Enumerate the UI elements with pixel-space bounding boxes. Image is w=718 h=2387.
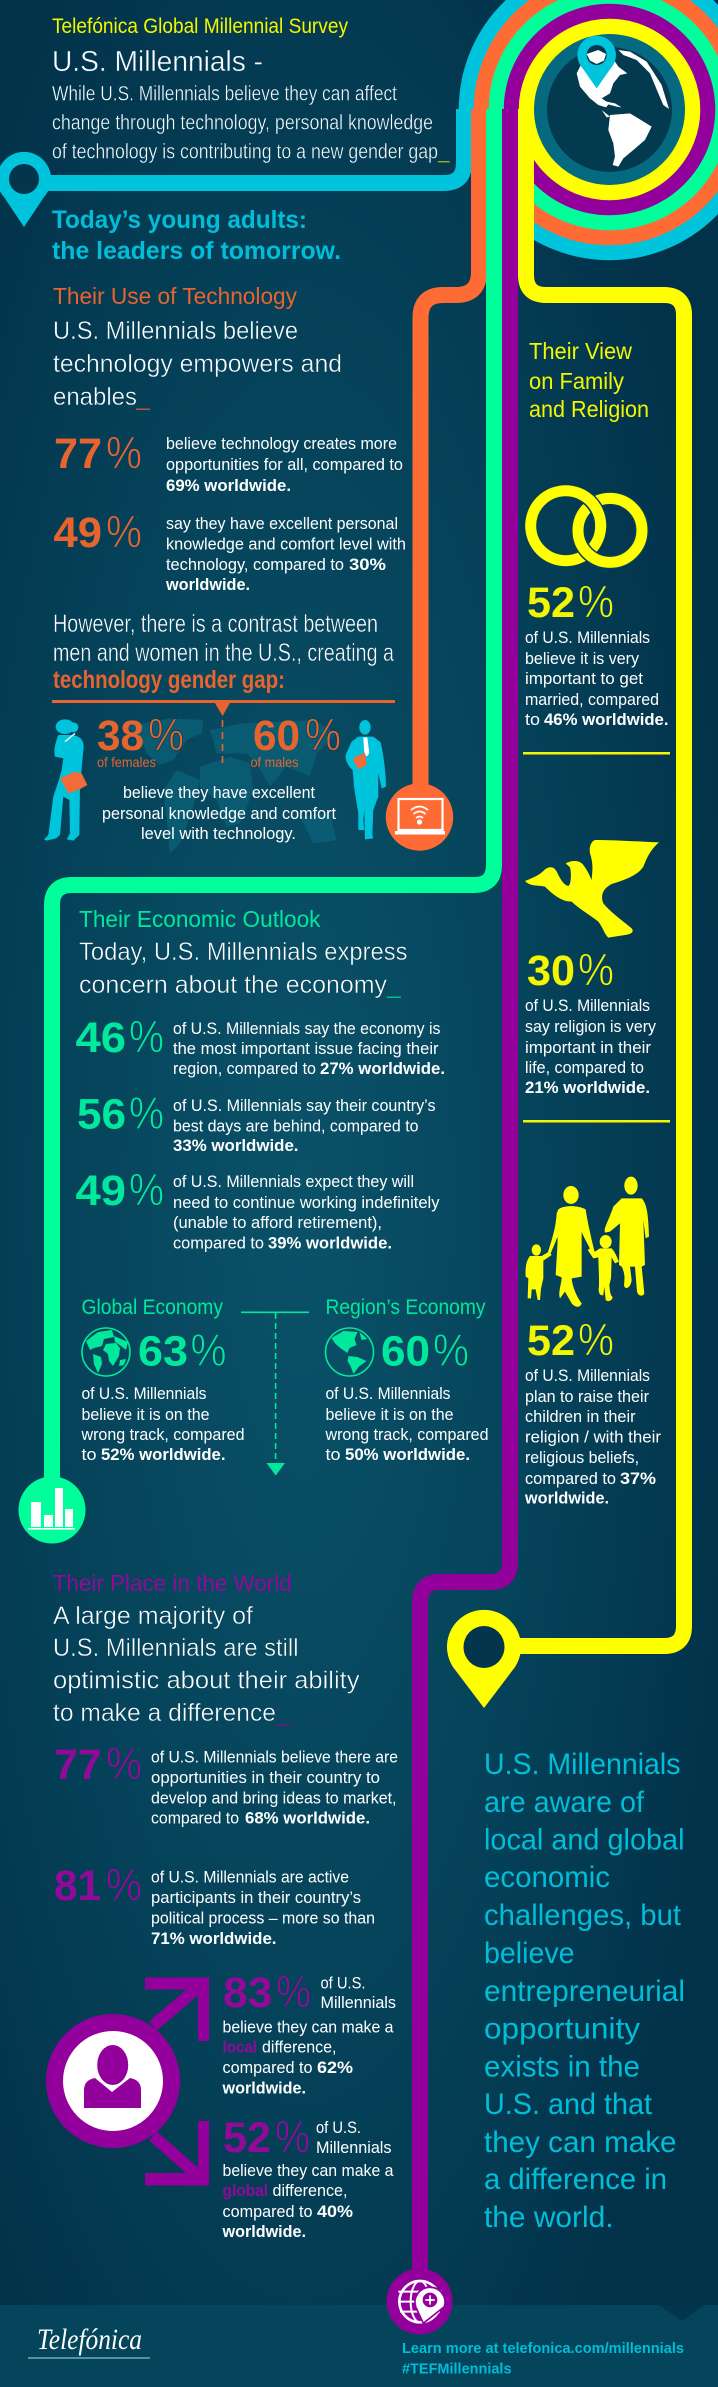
icon: wedding rings [531,491,642,562]
stat: 52% global difference [222,2111,394,2241]
stat: 30% religion: say religion is very [525,1017,656,1036]
stat: 52% married: believe it is very [525,649,639,668]
stat: 81%: participants in their country’s [151,1888,361,1907]
stat: 52% raise children: 37% [620,1469,656,1488]
subheading: young adults [52,206,341,265]
stat: 56%: of U.S. Millennials say their country’s [173,1096,436,1115]
panel: place in the world [46,1570,398,2241]
stat: 52% global difference: 52 [223,2114,271,2162]
stat: 52% global difference: 40% [317,2202,353,2221]
gender gap statement: men and women in the U.S., creating a [53,639,394,667]
conclusion text: they can make [484,2126,676,2159]
stat: 49%: (unable to afford retirement), [173,1213,382,1232]
ring: green line [52,0,718,1490]
section intro [79,938,408,999]
stat: 83% local difference: of U.S. [320,1974,366,1992]
survey title: Telefónica Global Millennial Survey [52,15,348,38]
stat: 38% of females: of females [97,754,156,770]
intro paragraph: of technology is contributing to a new gender gap [52,140,438,164]
stat: 83% local difference: local [222,2038,257,2056]
stat: 46%: the most important issue facing their [173,1039,439,1058]
section intro: _ [386,971,402,999]
stat: 30% religion: 21% worldwide. [525,1078,650,1097]
stat: 49%: 49 [54,509,102,557]
stat: 52% global difference: difference, [272,2181,348,2200]
subheading: young adults: the leaders of tomorrow. [52,237,341,265]
stat: 49% [76,1164,440,1252]
icon: dove [525,840,659,938]
intro paragraph: While U.S. Millennials believe they can affect [52,82,397,106]
stat: 49%: knowledge and comfort level with [166,534,406,554]
gender gap caption [102,783,336,843]
stat: 81%: 81 [54,1862,101,1910]
stat: 52% global difference: % [275,2111,310,2162]
section intro: _ [275,1699,291,1727]
stat: 52% raise children: children in their [525,1407,636,1426]
stat: 49%: % [129,1164,164,1215]
stat: 52% global difference: compared to [222,2202,312,2221]
column: region's economy: 50% worldwide. [345,1445,470,1464]
gender gap caption: level with technology. [141,824,296,843]
stat: 49%: compared to [173,1234,264,1252]
stat: 52% married: of U.S. Millennials [525,628,650,647]
stat: 56%: 33% worldwide. [173,1136,298,1155]
section heading: Their Use of Technology [53,283,297,309]
stat: 83% local difference: compared to [222,2058,312,2077]
stat: 46%: 46 [76,1014,126,1062]
panel: use of technology [44,283,453,851]
stat: 81%: % [106,1859,142,1910]
stat: 77% [54,1738,398,1828]
section intro: U.S. Millennials are still [53,1634,298,1662]
stat: 52% raise children: of U.S. Millennials [525,1366,650,1385]
stat: 46%: region, compared to [173,1059,316,1078]
stat: 49%: of U.S. Millennials expect they will [173,1172,414,1191]
section heading: Their Economic Outlook [79,906,321,932]
learn more link [402,2340,684,2378]
conclusion text: the world. [484,2201,614,2234]
section intro: optimistic about their ability [53,1666,360,1694]
stat: 52% married: to [525,710,540,729]
section heading: Their Place in the World [53,1570,292,1596]
column: global economy: 63 [138,1328,188,1376]
stat: 49%: worldwide. [165,575,250,594]
section intro: concern about the economy [79,971,387,999]
stat: 77%: compared to [151,1808,239,1828]
gender gap caption: believe they have excellent [123,783,315,802]
column: region's economy: % [433,1325,469,1376]
stat: 38% of females: % [148,709,184,760]
stat: 52% married: 46% worldwide. [544,710,668,729]
conclusion text: economic [484,1861,610,1894]
ring: cyan line [24,0,718,252]
ring: orange line [420,0,718,790]
stat: 49% [54,506,406,594]
stat: 77%: opportunities for all, compared to [166,455,403,474]
stat: 52% married [525,576,668,729]
gender gap statement: However, there is a contrast between [53,610,378,638]
stat: 52% married: married, compared [525,690,659,709]
conclusion text: challenges, but [484,1899,682,1932]
section intro: _ [135,383,151,411]
stat: 60% of males [250,709,341,770]
stat: 52% raise children: religion / with their [525,1428,661,1446]
figure: man [346,720,386,839]
stat: 46%: % [129,1011,164,1062]
column: global economy: wrong track, compared [81,1425,245,1444]
Telefónica logo: Telefónica [37,2323,142,2356]
gender gap statement [53,610,394,694]
stat: 30% religion: % [578,944,614,995]
gender gap caption: personal knowledge and comfort [102,804,336,823]
icon: person with arrows [46,1978,209,2186]
stat: 77%: 77 [54,430,102,478]
stat: 46%: 27% worldwide. [320,1059,445,1078]
icon: globe with plus pin [386,2268,452,2334]
column: global economy: to [82,1445,96,1464]
stat: 60% of males: % [305,709,341,760]
stat: 30% religion: of U.S. Millennials [525,996,650,1015]
stat: 49%: 39% worldwide. [268,1234,392,1252]
section intro: A large majority of [53,1602,253,1630]
stat: 77%: 69% worldwide. [166,476,291,495]
stat: 52% married: % [578,576,614,627]
stat: 81%: political process – more so than [151,1908,375,1928]
conclusion text: local and global [484,1824,684,1856]
stat: 30% religion [525,944,656,1097]
stat: 81%: of U.S. Millennials are active [151,1868,349,1886]
stat: 77%: 68% worldwide. [245,1808,370,1828]
stat: 52% global difference: Millennials [316,2138,392,2157]
conclusion text: U.S. Millennials [484,1748,680,1781]
icon: globe Americas [326,1328,374,1376]
learn more link: Learn more at telefonica.com/millennials [402,2340,684,2357]
stat: 77%: of U.S. Millennials believe there are [151,1748,398,1766]
stat: 83% local difference: believe they can make a [222,2018,394,2036]
stat: 77%: 77 [54,1741,102,1789]
stat: 46%: of U.S. Millennials say the economy is [173,1019,440,1038]
conclusion text: are aware of [484,1786,645,1819]
stat: 49%: need to continue working indefinitely [173,1193,440,1212]
stat: 49%: 30% [349,555,386,574]
header text [52,15,450,164]
section intro [53,1602,360,1727]
stat: 52% raise children: religious beliefs, [525,1448,639,1467]
icon: bar chart [18,1476,86,1544]
stat: 30% religion: 30 [527,947,575,995]
stat: 81%: 71% worldwide. [151,1929,276,1948]
ring: purple line [420,12,708,2280]
main heading: U.S. Millennials - [52,46,263,78]
column: region's economy: Region’s Economy [326,1296,486,1319]
stat: 60% of males: 60 [253,712,300,760]
icon: laptop with wifi [386,783,453,851]
icon: cyan start pin [0,152,51,227]
section heading: on Family [529,368,624,394]
stat: 52% raise children: % [578,1314,614,1365]
section intro: technology empowers and [53,350,342,378]
stat: 38% of females [97,709,184,770]
conclusion text: exists in the [484,2050,640,2084]
section intro: to make a difference [53,1699,276,1727]
stat: 52% global difference: of U.S. [316,2118,361,2137]
figure: woman [44,719,87,841]
stat: 83% local difference: % [276,1966,311,2017]
column: global economy: of U.S. Millennials [82,1384,206,1403]
section intro: Today, U.S. Millennials express [79,938,408,966]
stat: 49%: 49 [76,1167,126,1215]
column: region's economy [325,1296,488,1464]
stat: 77%: develop and bring ideas to market, [151,1788,396,1808]
stat: 52% married: 52 [527,579,575,627]
stat: 77% [54,427,403,495]
ring: yellow line [510,26,692,1646]
stat: 52% global difference: global [222,2181,268,2200]
learn more link: #TEFMillennials [402,2360,512,2378]
column: global economy: believe it is on the [82,1405,210,1424]
panel: economic outlook [18,906,488,1544]
icon: family silhouette [526,1177,649,1307]
stat: 56%: best days are behind, compared to [173,1116,418,1136]
stat: 77%: % [106,1738,142,1789]
stat: 83% local difference [222,1966,396,2098]
conclusion text [484,1748,685,2234]
stat: 81% [54,1859,375,1948]
section intro: U.S. Millennials believe [53,317,298,345]
column: region's economy: to [326,1445,340,1464]
column: region's economy: wrong track, compared [325,1425,488,1444]
intro paragraph: change through technology, personal knowledge [52,112,433,134]
panel: view on family and religion [523,338,670,1508]
stat: 49%: say they have excellent personal [166,514,398,533]
stat: 77%: opportunities in their country to [151,1768,380,1787]
conclusion text: U.S. and that [484,2088,653,2121]
icon: globe Africa and Europe [82,1328,130,1376]
subheading: young adults: Today’s young adults: [52,206,307,234]
stat: 83% local difference: difference, [262,2038,336,2056]
icon: globe with pin [534,34,685,185]
conclusion text: entrepreneurial [484,1975,685,2008]
intro paragraph: _ [437,140,450,164]
stat: 52% raise children: 52 [527,1317,575,1365]
stat: 56%: 56 [77,1090,126,1138]
gender gap statement: technology gender gap: [53,666,285,694]
column: global economy: Global Economy [82,1296,223,1319]
section heading: Their View [529,338,632,364]
divider with pointer [52,700,395,768]
stat: 30% religion: life, compared to [525,1058,644,1077]
stat: 83% local difference: 62% [317,2058,353,2077]
stat: 83% local difference: worldwide. [222,2078,306,2098]
section intro: enables [53,383,137,411]
column: region's economy: of U.S. Millennials [326,1384,450,1403]
stat: 46% [76,1011,445,1078]
world map behind gender gap stats [127,718,337,853]
icon: yellow end pin [447,1610,521,1708]
column: region's economy: believe it is on the [326,1405,454,1424]
stat: 56% [77,1088,436,1155]
stat: 77%: % [106,427,142,478]
stat: 52% raise children: worldwide. [524,1488,609,1508]
stat: 30% religion: important in their [525,1038,651,1057]
section intro [53,317,342,411]
stat: 83% local difference: 83 [223,1969,272,2017]
stat: 77%: believe technology creates more [166,434,397,453]
stat: 38% of females: 38 [97,712,144,760]
stat: 52% raise children: compared to [525,1469,616,1488]
stat: 52% married: important to get [525,669,643,688]
stat: 52% global difference: worldwide. [222,2222,306,2241]
intro paragraph [52,82,450,164]
conclusion text: opportunity [484,2012,640,2046]
stat: 56%: % [129,1088,164,1138]
stat: 52% raise children [524,1314,661,1508]
footer band [0,2305,718,2387]
stat: 52% raise children: plan to raise their [525,1387,649,1406]
conclusion text: believe [484,1937,574,1970]
column: region's economy: 60 [381,1328,430,1376]
column: global economy: 52% worldwide. [101,1445,226,1464]
section heading [529,338,649,422]
column: global economy: % [190,1325,226,1376]
connector with dashed arrow [241,1312,309,1476]
stat: 52% global difference: believe they can make a [222,2161,394,2180]
stat: 49%: technology, compared to [166,555,344,574]
stat: 83% local difference: Millennials [320,1993,396,2012]
stat: 60% of males: of males [250,754,298,770]
section heading: and Religion [529,396,649,422]
conclusion text: a difference in [484,2163,667,2196]
stat: 49%: % [106,506,142,557]
column: global economy [81,1296,245,1464]
